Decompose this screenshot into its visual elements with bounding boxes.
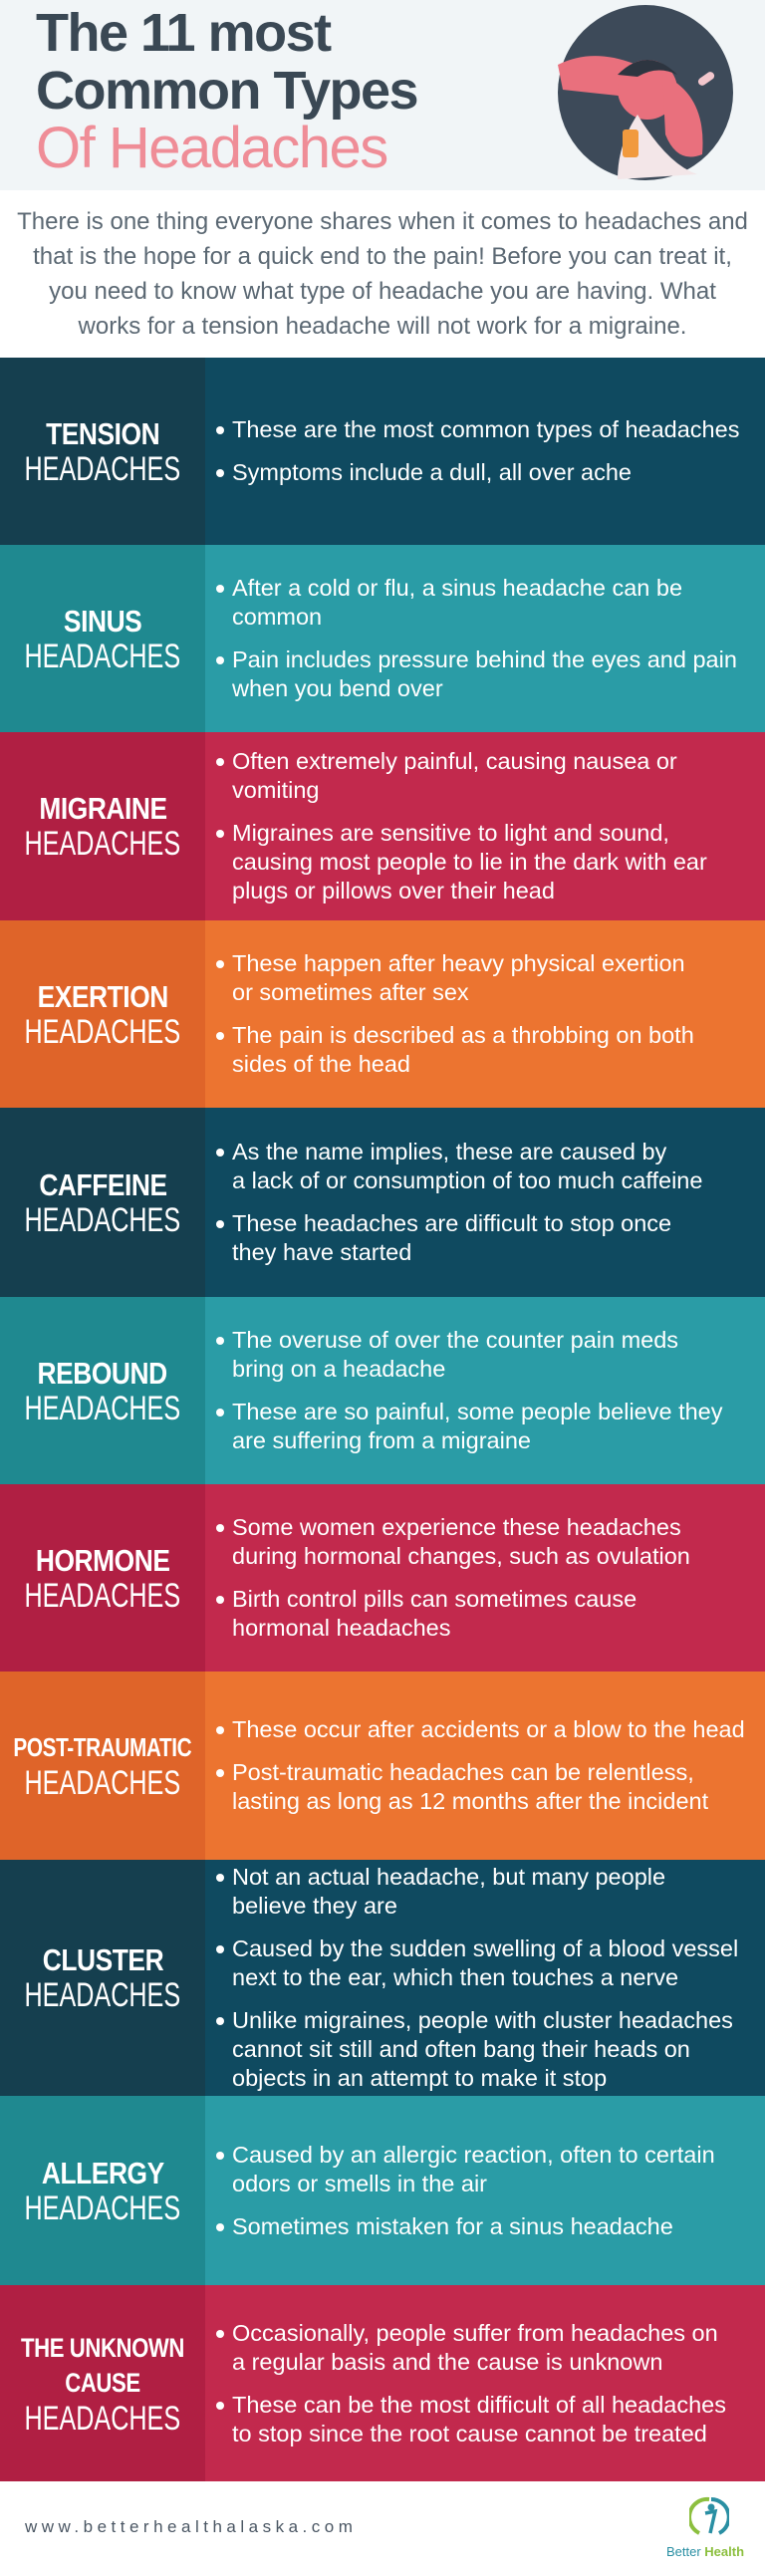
- intro text: that is the hope for a quick end to the pain! Before you can treat it,: [33, 243, 732, 270]
- panel: exertion: These happen after heavy physical exertion: [232, 950, 685, 976]
- panel: exertion: sides of the head: [232, 1051, 410, 1077]
- footer url: www.betterhealthalaska.com: [25, 2517, 357, 2536]
- panel: hormone: HEADACHES: [25, 1576, 180, 1614]
- panel: caffeine: HEADACHES: [25, 1201, 180, 1239]
- title: Of Headaches: [36, 116, 387, 180]
- panel: sinus: Pain includes pressure behind the eyes and pain: [232, 646, 737, 672]
- panel: migraine: plugs or pillows over their head: [232, 878, 555, 903]
- panel: rebound: [0, 1297, 765, 1484]
- panel: cluster: Unlike migraines, people with cluster headaches: [232, 2007, 733, 2033]
- panel: caffeine: [0, 1108, 765, 1297]
- panel: cluster: Caused by the sudden swelling of a blood vessel: [232, 1935, 738, 1961]
- panel: caffeine: As the name implies, these are caused by: [232, 1139, 666, 1164]
- intro text: you need to know what type of headache you are having. What: [49, 278, 716, 305]
- panel: unknown cause: Occasionally, people suffer from headaches on: [232, 2319, 718, 2345]
- panel: tension: HEADACHES: [25, 450, 180, 488]
- title: Common Types: [36, 61, 417, 121]
- panel: post-traumatic: Post-traumatic headaches can be relentless,: [232, 1759, 694, 1785]
- panel: migraine: vomiting: [232, 777, 320, 803]
- intro text: works for a tension headache will not work for a migraine.: [79, 313, 686, 340]
- panel: rebound: bring on a headache: [232, 1356, 445, 1382]
- panel: tension: These are the most common types of headaches: [232, 416, 739, 442]
- panel: sinus: HEADACHES: [25, 638, 180, 675]
- panel: rebound: are suffering from a migraine: [232, 1427, 531, 1453]
- panel: rebound: REBOUND: [38, 1355, 167, 1391]
- panel: unknown cause: a regular basis and the cause is unknown: [232, 2349, 662, 2375]
- panel: post-traumatic: [0, 1672, 765, 1860]
- panel: migraine: MIGRAINE: [39, 791, 166, 826]
- intro text: There is one thing everyone shares when it comes to headaches and: [17, 208, 748, 235]
- panel: allergy: odors or smells in the air: [232, 2170, 487, 2195]
- panel: cluster: [0, 1860, 765, 2096]
- panel: hormone: hormonal headaches: [232, 1615, 450, 1641]
- panel: sinus: [0, 545, 765, 732]
- panel: allergy: HEADACHES: [25, 2190, 180, 2227]
- panel: cluster: Not an actual headache, but many people: [232, 1864, 665, 1890]
- logo: Better Health: Better Health: [666, 2544, 744, 2559]
- panel: hormone: during hormonal changes, such as ovulation: [232, 1543, 690, 1569]
- panel: unknown cause: to stop since the root cause cannot be treated: [232, 2421, 707, 2447]
- panel: rebound: HEADACHES: [25, 1389, 180, 1426]
- illustration: person with headache: [558, 5, 733, 180]
- panel: allergy: ALLERGY: [42, 2156, 163, 2190]
- panel: cluster: HEADACHES: [25, 1976, 180, 2014]
- panel: sinus: common: [232, 604, 322, 630]
- panel: caffeine: a lack of or consumption of too much caffeine: [232, 1167, 702, 1193]
- panel: sinus: SINUS: [64, 604, 141, 638]
- panel: cluster: objects in an attempt to make it stop: [232, 2065, 607, 2091]
- panel: caffeine: CAFFEINE: [39, 1167, 166, 1201]
- panel: cluster: CLUSTER: [42, 1942, 163, 1977]
- panel: allergy: Caused by an allergic reaction, often to certain: [232, 2142, 715, 2168]
- panel: hormone: [0, 1484, 765, 1672]
- panel: caffeine: These headaches are difficult to stop once: [232, 1210, 671, 1236]
- panel: cluster: believe they are: [232, 1893, 397, 1919]
- panel: migraine: [0, 732, 765, 920]
- panel: sinus: when you bend over: [232, 675, 443, 701]
- panel: unknown cause: These can be the most difficult of all headaches: [232, 2391, 726, 2417]
- panel: post-traumatic: lasting as long as 12 months after the incident: [232, 1788, 708, 1814]
- panel: tension: TENSION: [46, 416, 159, 450]
- panel: post-traumatic: HEADACHES: [25, 1764, 180, 1802]
- panel: exertion: HEADACHES: [25, 1012, 180, 1050]
- panel: hormone: HORMONE: [36, 1542, 169, 1578]
- panel: exertion: EXERTION: [37, 978, 168, 1014]
- panel: cluster: cannot sit still and often bang their heads on: [232, 2036, 690, 2062]
- panel: migraine: HEADACHES: [25, 825, 180, 863]
- header background: [0, 0, 765, 190]
- intro text: [17, 208, 748, 340]
- panel: unknown cause: [0, 2285, 765, 2481]
- panel: rebound: These are so painful, some people believe they: [232, 1399, 723, 1424]
- panel: caffeine: they have started: [232, 1239, 411, 1265]
- panel: rebound: The overuse of over the counter pain meds: [232, 1327, 678, 1353]
- panel: allergy: [0, 2096, 765, 2285]
- panel: migraine: causing most people to lie in the dark with ear: [232, 849, 707, 875]
- panel: tension: [0, 358, 765, 545]
- panel: sinus: After a cold or flu, a sinus headache can be: [232, 575, 682, 601]
- panel: tension: Symptoms include a dull, all over ache: [232, 459, 632, 485]
- logo: Better Health: [666, 2496, 744, 2559]
- panel: unknown cause: CAUSE: [65, 2367, 140, 2397]
- panel: exertion: [0, 920, 765, 1108]
- panel: exertion: The pain is described as a throbbing on both: [232, 1022, 694, 1048]
- panel: cluster: next to the ear, which then touches a nerve: [232, 1964, 678, 1990]
- panel: allergy: Sometimes mistaken for a sinus headache: [232, 2213, 673, 2239]
- title: The 11 most: [36, 3, 331, 63]
- panel: exertion: or sometimes after sex: [232, 979, 469, 1005]
- panel: migraine: Migraines are sensitive to light and sound,: [232, 820, 669, 846]
- panel: unknown cause: HEADACHES: [25, 2399, 180, 2437]
- panel: post-traumatic: POST-TRAUMATIC: [14, 1732, 191, 1762]
- panel: unknown cause: THE UNKNOWN: [21, 2333, 184, 2363]
- title: [36, 3, 417, 180]
- panel: migraine: Often extremely painful, causing nausea or: [232, 748, 677, 774]
- panel: hormone: Birth control pills can sometimes cause: [232, 1586, 637, 1612]
- panel: post-traumatic: These occur after accidents or a blow to the head: [232, 1716, 745, 1742]
- panel: hormone: Some women experience these headaches: [232, 1514, 681, 1540]
